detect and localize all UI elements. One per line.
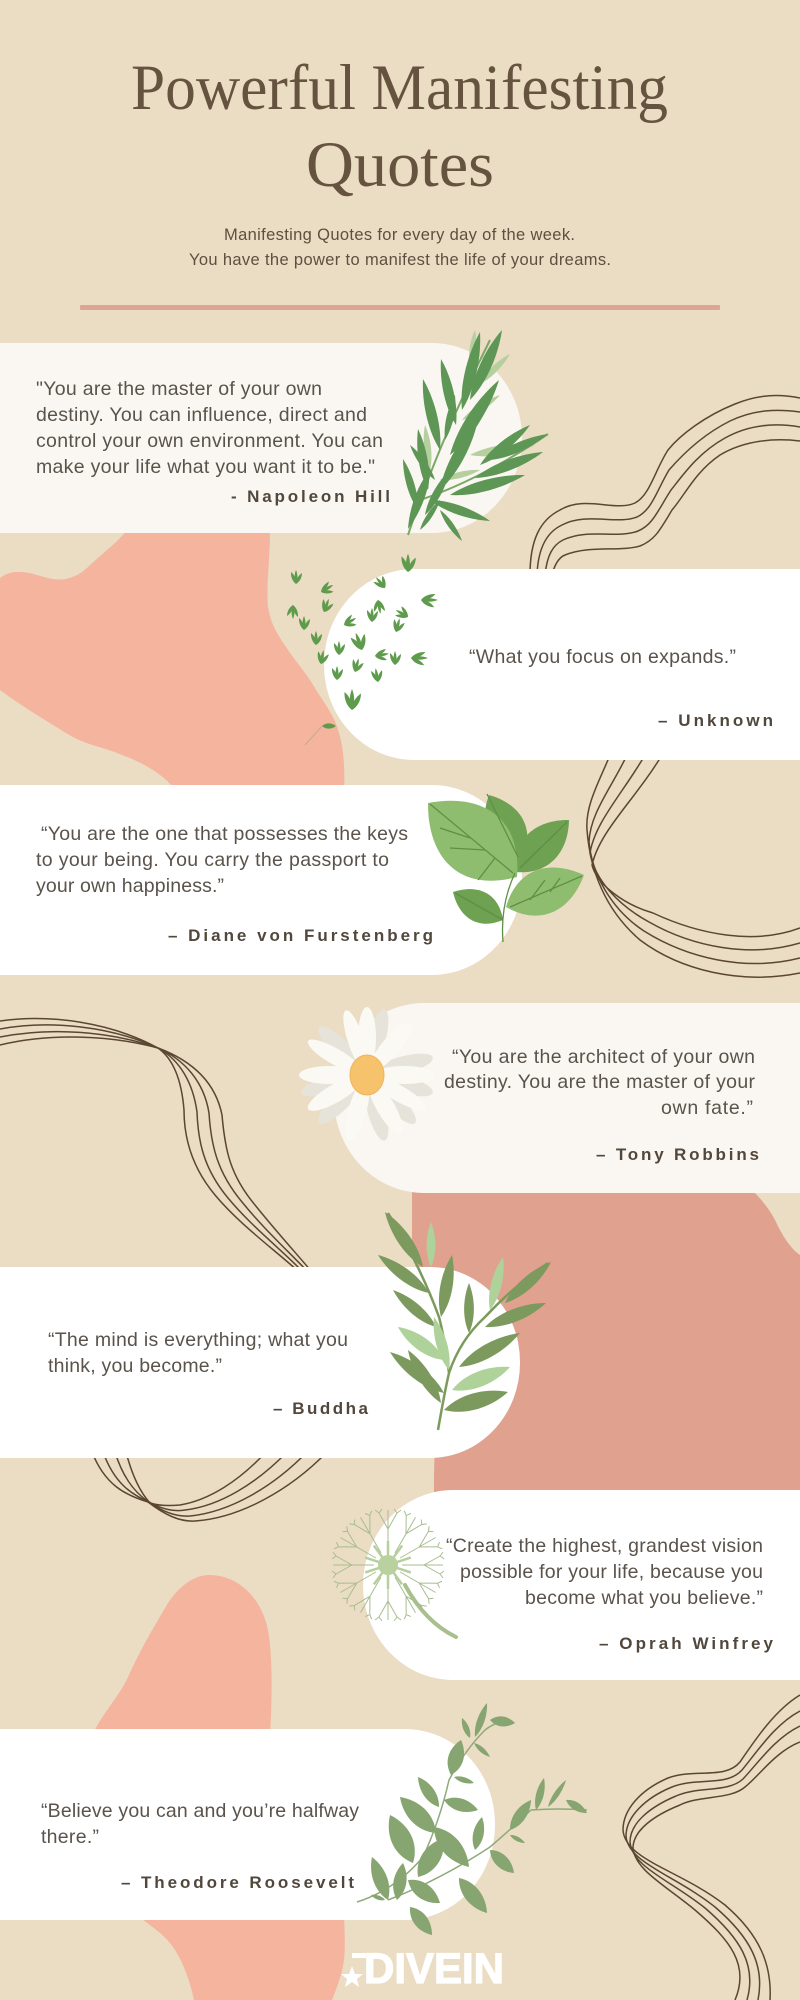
- blob: upper left salmon: [0, 530, 344, 790]
- subtitle: [189, 226, 611, 269]
- quote text: “Believe you can and you’re halfway: [41, 1800, 359, 1822]
- quote text: become what you believe.”: [525, 1587, 763, 1609]
- quote text: “What you focus on expands.”: [469, 646, 736, 668]
- quote text: [446, 1535, 763, 1609]
- quote text: “You are the architect of your own: [452, 1046, 755, 1068]
- blob: bottom salmon: [136, 1915, 345, 2000]
- panel: Oprah Winfrey quote: [332, 1490, 800, 1680]
- card shape: [334, 1003, 800, 1193]
- wavy lines: lower left: [92, 1452, 327, 1521]
- quote text: your own happiness.”: [36, 875, 224, 897]
- card shape: [0, 785, 522, 975]
- quote text: own fate.”: [661, 1097, 753, 1119]
- quote text: [36, 378, 383, 478]
- card shape: [0, 343, 522, 533]
- panel: Buddha quote: [0, 1208, 555, 1458]
- subtitle: Manifesting Quotes for every day of the week.: [224, 226, 575, 244]
- panel: Tony Robbins quote: [299, 1003, 800, 1193]
- quote text: make your life what you want it to be.": [36, 456, 375, 478]
- quote text: control your own environment. You can: [36, 430, 383, 452]
- quote text: [36, 823, 408, 897]
- icon: green leaves: [406, 777, 593, 942]
- quote text: "You are the master of your own: [36, 378, 322, 400]
- quote text: “You are the one that possesses the keys: [41, 823, 408, 845]
- wavy lines: middle right: [587, 755, 800, 977]
- quote text: [444, 1046, 756, 1119]
- icon: olive branch: [374, 1208, 555, 1430]
- quote text: [48, 1329, 348, 1377]
- logo: DIVEIN: DIVEIN: [364, 1945, 504, 1993]
- panel: Napoleon Hill quote: [0, 328, 550, 543]
- icon: scattered leaves: [286, 554, 438, 745]
- divider rule: [80, 305, 720, 310]
- panel: Unknown quote: [286, 554, 800, 760]
- title: Quotes: [306, 129, 494, 201]
- wavy lines: bottom right: [623, 1695, 800, 2000]
- quote text: “Create the highest, grandest vision: [446, 1535, 763, 1557]
- author: – Tony Robbins: [596, 1145, 759, 1164]
- wavy lines: middle left: [0, 1019, 312, 1272]
- author: - Napoleon Hill: [231, 487, 390, 506]
- author: – Unknown: [658, 711, 773, 730]
- panel: Diane von Furstenberg quote: [0, 777, 593, 975]
- author: – Diane von Furstenberg: [168, 926, 433, 945]
- icon: eucalyptus branch: [357, 1702, 589, 1939]
- title: [131, 52, 668, 201]
- subtitle: You have the power to manifest the life of your dreams.: [189, 251, 611, 269]
- quote text: there.”: [41, 1826, 99, 1848]
- panel: Theodore Roosevelt quote: [0, 1702, 589, 1939]
- author: – Oprah Winfrey: [599, 1634, 774, 1653]
- quote text: destiny. You are the master of your: [444, 1071, 756, 1093]
- blob: lower left salmon: [92, 1575, 272, 1735]
- blob: right rose: [412, 1190, 800, 1492]
- quote text: “The mind is everything; what you: [48, 1329, 348, 1351]
- icon: daisy: [299, 1007, 435, 1143]
- author: – Theodore Roosevelt: [121, 1873, 354, 1892]
- icon: dandelion: [332, 1509, 456, 1637]
- title: Powerful Manifesting: [131, 52, 668, 124]
- quote text: think, you become.”: [48, 1355, 222, 1377]
- quote text: to your being. You carry the passport to: [36, 849, 389, 871]
- card shape: [363, 1490, 800, 1680]
- quote text: possible for your life, because you: [460, 1561, 763, 1583]
- quote text: destiny. You can influence, direct and: [36, 404, 367, 426]
- icon: rosemary sprig: [399, 328, 550, 543]
- card shape: [324, 569, 800, 760]
- wavy lines: top right: [530, 396, 800, 575]
- author: – Buddha: [273, 1399, 369, 1418]
- card shape: [0, 1267, 520, 1458]
- card shape: [0, 1729, 495, 1920]
- quote text: [41, 1800, 359, 1848]
